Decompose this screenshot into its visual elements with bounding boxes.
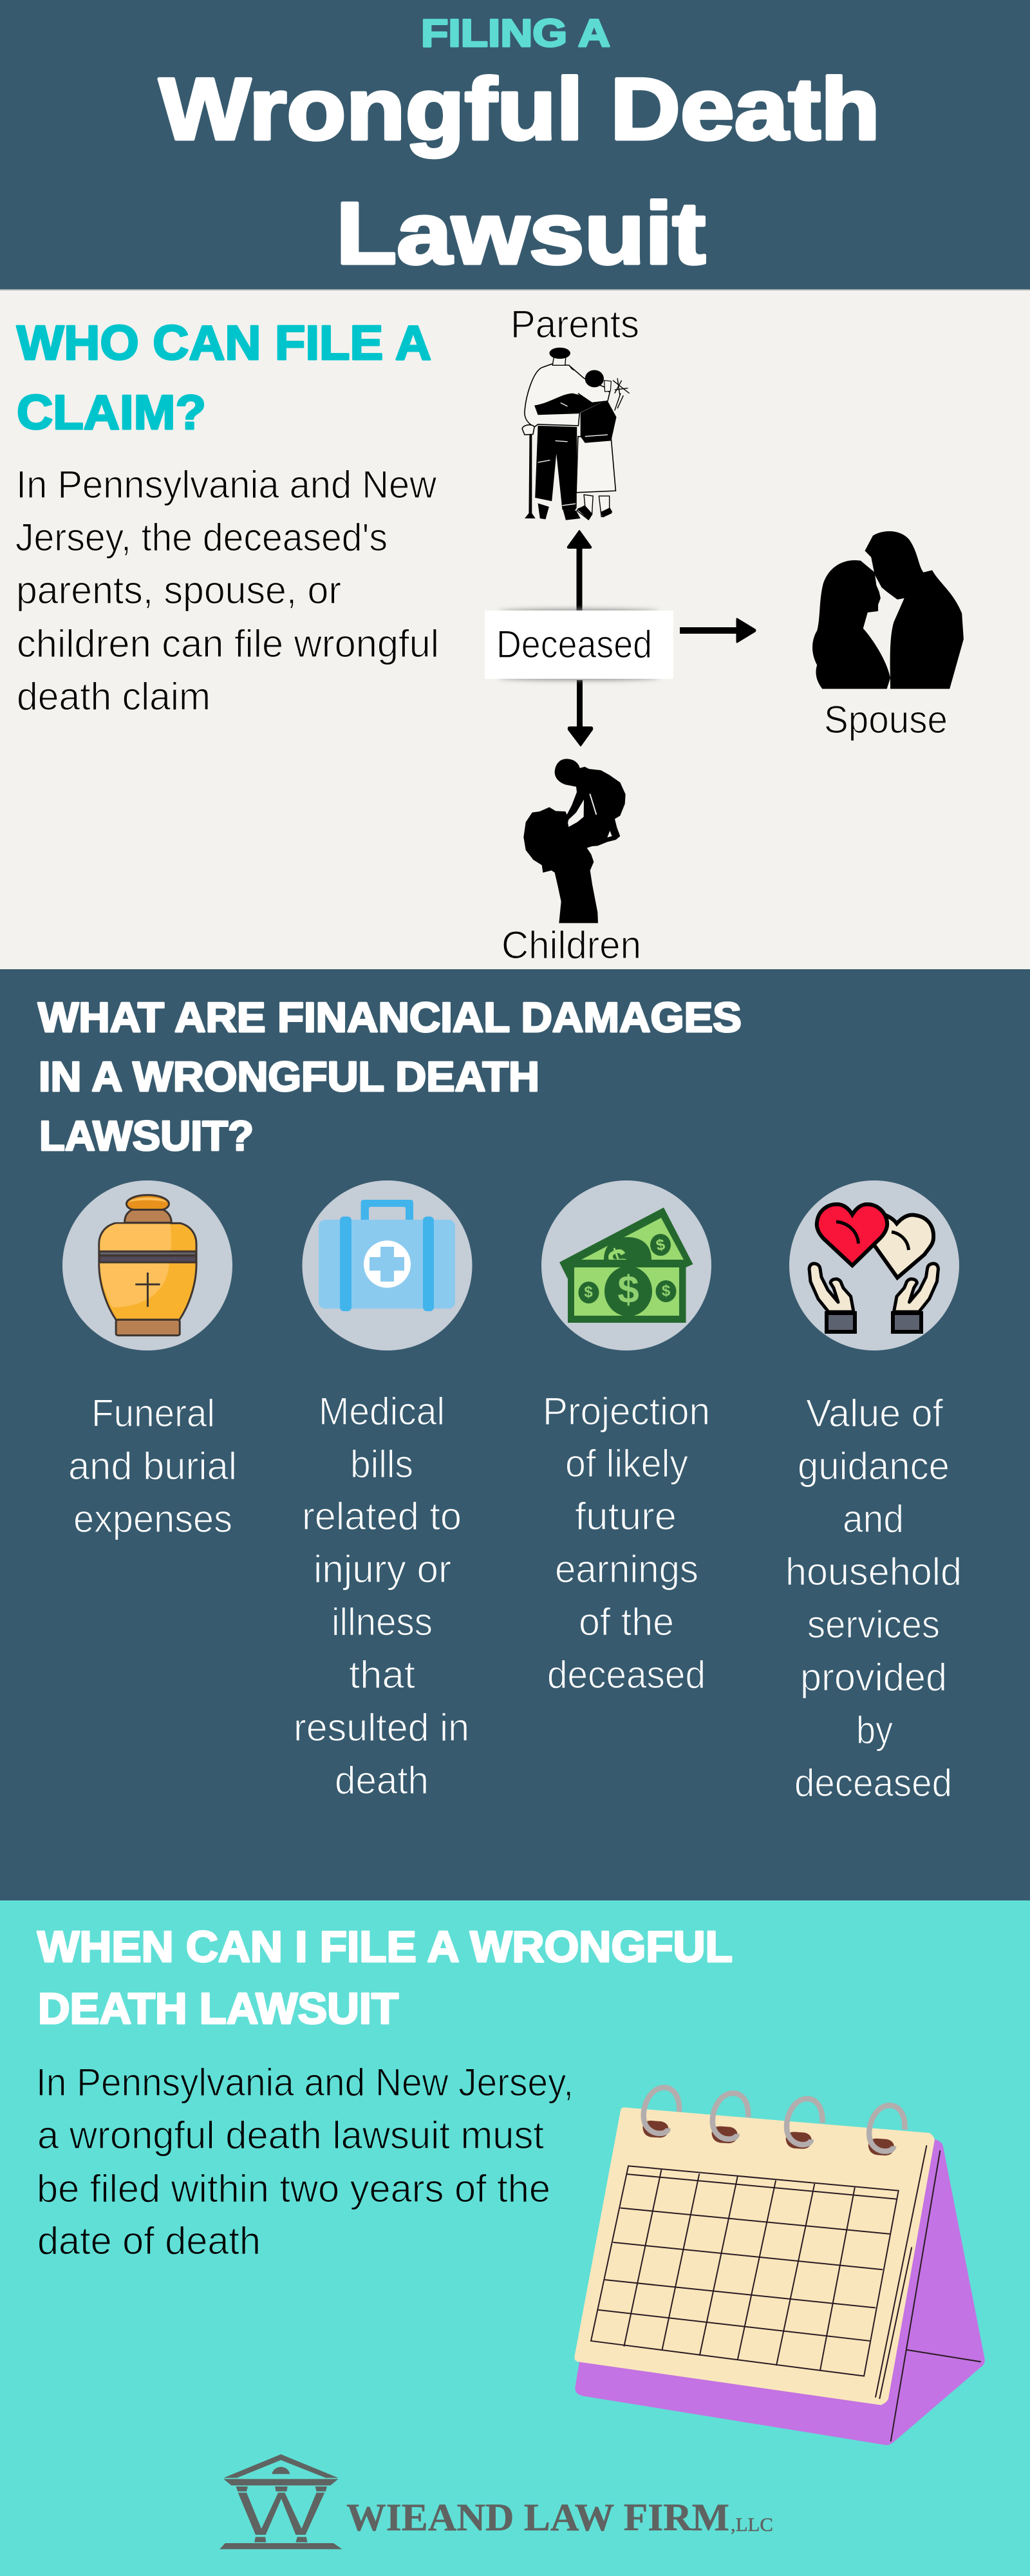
text: medical bills: resulted in [294,1706,469,1749]
text: medical bills: Medical [319,1390,445,1433]
text: projection of future earnings: future [575,1495,677,1538]
text block: filing deadline: In Pennsylvania and New Jersey, [36,2061,574,2104]
title: Wrongful Death [159,60,880,158]
text: medical bills: bills [350,1443,413,1486]
text: medical bills: illness [332,1600,433,1643]
arrow: down to children [568,680,592,746]
icon: desk calendar [574,2088,985,2445]
text block: who can file: Jersey, the deceased's [15,516,388,559]
label: children: Children [501,923,641,967]
text: funeral and burial expenses [68,1392,237,1540]
panel: who can file a claim [0,290,1030,969]
heading: financial damages [38,994,742,1159]
heading: when can I file: WHEN CAN I FILE A WRONGFUL [37,1922,733,1971]
text: medical bills: death [335,1759,429,1802]
text: value of guidance: provided [800,1656,947,1699]
text: funeral and burial expenses: Funeral [91,1392,215,1435]
text: projection of future earnings: Projection [543,1390,710,1433]
icon: money: $ [662,1282,671,1300]
text: funeral and burial expenses: expenses [73,1497,232,1540]
icon: money: $ [617,1268,639,1311]
icon: money [541,1180,711,1350]
text: medical bills: related to [302,1495,462,1538]
text: projection of future earnings: deceased [547,1653,706,1696]
icon: courthouse W [220,2454,342,2549]
panel: financial damages [37,1001,959,1797]
heading: financial damages: LAWSUIT? [39,1112,254,1159]
text block: who can file: children can file wrongful [17,622,439,665]
panel: header [0,0,1030,290]
logo: wieand law firm [220,2454,773,2549]
arrow: right to spouse [680,618,756,643]
title: Lawsuit [336,184,706,282]
label: spouse: Spouse [824,698,948,741]
text: value of guidance: deceased [794,1761,952,1804]
icon: money: $ [603,1239,635,1284]
kicker: filing a: FILING A [421,12,610,55]
text block: who can file: parents, spouse, or [16,569,341,612]
title [159,60,880,282]
text: value of guidance: by [856,1709,893,1752]
text block: who can file: death claim [17,675,211,718]
wordmark: ,LLC [731,2514,773,2535]
text: value of guidance: household [785,1550,962,1593]
text block: who can file [15,463,439,718]
wordmark: WIEAND LAW FIRM [346,2496,729,2539]
text: medical bills [294,1390,469,1802]
text: projection of future earnings [543,1390,710,1696]
icon: hearts and hands [789,1180,959,1350]
heading: financial damages: IN A WRONGFUL DEATH [39,1053,539,1100]
label: parents: Parents [510,303,639,346]
icon: urn [62,1180,232,1350]
text: value of guidance: guidance [798,1444,950,1488]
box: deceased: Deceased [496,623,652,666]
heading: when can I file [37,1922,733,2033]
icon: spouse silhouette [812,531,964,689]
text block: who can file: In Pennsylvania and New [16,463,437,506]
icon: children silhouette [523,759,626,923]
text block: filing deadline: be filed within two years of the [37,2167,550,2210]
icon: medical kit [303,1180,473,1350]
text: projection of future earnings: of likely [565,1442,688,1485]
text: medical bills: that [349,1653,415,1696]
text block: filing deadline: date of death [37,2219,261,2262]
heading: financial damages: WHAT ARE FINANCIAL DAMAGES [38,994,742,1041]
text: funeral and burial expenses: and burial [68,1444,237,1488]
text: projection of future earnings: earnings [555,1548,698,1591]
icon: parents embracing [522,348,630,520]
icon: money: $ [655,1236,667,1255]
box: deceased [485,609,673,680]
heading: who can file a claim: WHO CAN FILE A [17,316,431,370]
text: value of guidance: and [843,1497,904,1540]
text block: filing deadline [36,2061,574,2262]
text: value of guidance [785,1392,962,1804]
heading: when can I file: DEATH LAWSUIT [38,1984,398,2033]
panel: when can I file [0,1900,1030,2576]
arrow: up to parents [568,531,591,611]
text: value of guidance: Value of [806,1392,943,1435]
text: value of guidance: services [807,1603,940,1646]
text: medical bills: injury or [314,1548,451,1591]
heading: who can file a claim [17,316,431,439]
icon: money: $ [584,1283,593,1301]
heading: who can file a claim: CLAIM? [17,385,206,439]
text block: filing deadline: a wrongful death lawsuit must [37,2114,544,2157]
text: projection of future earnings: of the [579,1600,674,1643]
